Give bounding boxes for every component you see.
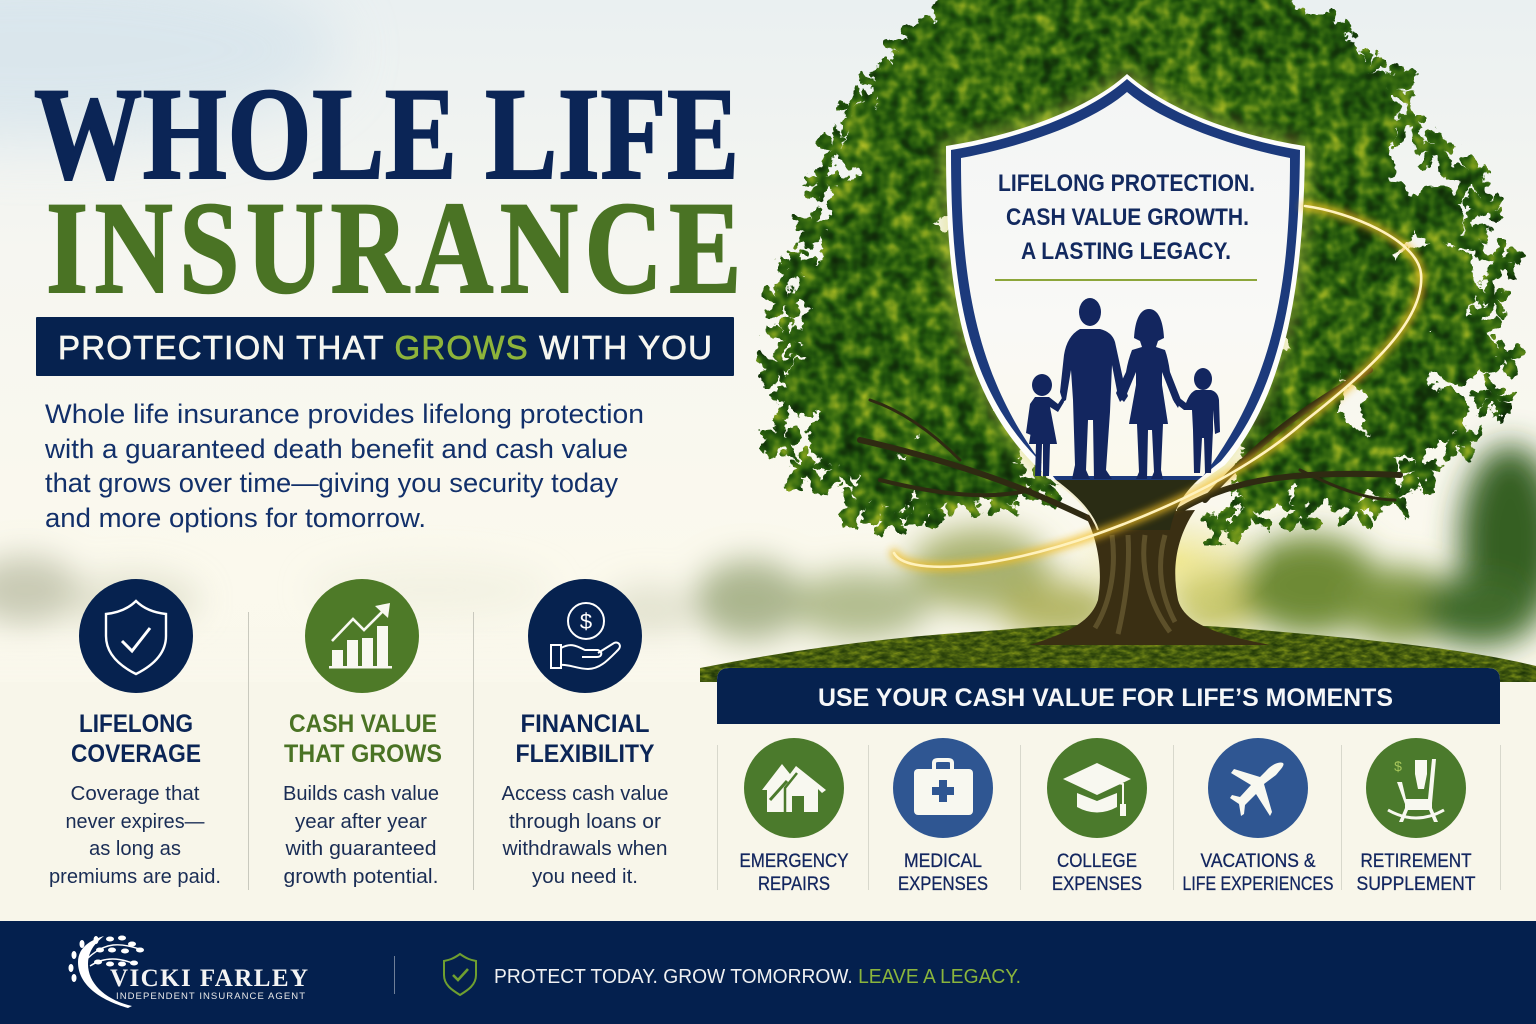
feature: lifelong coverage: as long as xyxy=(89,838,181,860)
feature: financial flexibility xyxy=(501,579,668,888)
intro paragraph: and more options for tomorrow. xyxy=(45,503,426,533)
title: WHOLE LIFE xyxy=(34,61,739,208)
icon: hand with coin xyxy=(528,579,642,693)
tagline: PROTECT TODAY. GROW TOMORROW. LEAVE A LEGACY. xyxy=(494,966,1021,988)
feature: financial flexibility: you need it. xyxy=(532,866,638,888)
item: college expenses xyxy=(1047,738,1147,895)
feature: financial flexibility: through loans or xyxy=(509,811,661,833)
icon: growth chart xyxy=(305,579,419,693)
feature: financial flexibility: withdrawals when xyxy=(501,838,668,860)
intro paragraph xyxy=(44,399,644,533)
item: vacations and life experiences: LIFE EXPERIENCES xyxy=(1182,874,1334,895)
feature: financial flexibility: FLEXIBILITY xyxy=(516,740,655,768)
feature: lifelong coverage: premiums are paid. xyxy=(49,866,221,888)
icon: hand with coin: $ xyxy=(580,609,592,634)
item: medical expenses xyxy=(893,738,993,895)
hill xyxy=(700,624,1536,682)
feature: cash value that grows: year after year xyxy=(295,811,427,833)
title xyxy=(34,61,741,322)
intro paragraph: with a guaranteed death benefit and cash value xyxy=(44,434,628,464)
item: medical expenses: MEDICAL xyxy=(904,851,982,872)
item: retirement supplement xyxy=(1356,738,1476,895)
item: emergency repairs: REPAIRS xyxy=(758,874,830,895)
tree trunk xyxy=(1030,510,1270,645)
item: retirement supplement: $ xyxy=(1394,758,1402,774)
feature: financial flexibility: FINANCIAL xyxy=(520,710,650,738)
intro paragraph: Whole life insurance provides lifelong protection xyxy=(45,399,644,429)
feature: cash value that grows: Builds cash value xyxy=(283,783,439,805)
feature: cash value that grows: THAT GROWS xyxy=(284,740,442,768)
glow around shield xyxy=(951,80,1300,470)
tree canopy xyxy=(754,0,1526,548)
feature: cash value that grows: with guaranteed xyxy=(284,838,436,860)
shield text: A LASTING LEGACY. xyxy=(1021,238,1231,265)
feature: lifelong coverage: never expires— xyxy=(66,811,204,833)
shield text: CASH VALUE GROWTH. xyxy=(1006,204,1249,231)
title: INSURANCE xyxy=(46,175,741,322)
feature: lifelong coverage: COVERAGE xyxy=(71,740,201,768)
feature: lifelong coverage xyxy=(49,579,221,888)
item: retirement supplement: RETIREMENT xyxy=(1360,851,1472,872)
panel heading: USE YOUR CASH VALUE FOR LIFE’S MOMENTS xyxy=(818,684,1393,712)
item: retirement supplement: SUPPLEMENT xyxy=(1356,874,1476,895)
logo: tree xyxy=(68,936,144,1008)
feature: lifelong coverage: Coverage that xyxy=(70,783,200,805)
subtitle banner: PROTECTION THAT GROWS WITH YOU xyxy=(58,329,712,366)
intro paragraph: that grows over time—giving you security today xyxy=(45,468,619,498)
item: college expenses: COLLEGE xyxy=(1057,851,1137,872)
item: emergency repairs: EMERGENCY xyxy=(740,851,849,872)
feature: cash value that grows: growth potential. xyxy=(284,866,438,888)
feature: financial flexibility: Access cash value xyxy=(502,783,668,805)
feature: cash value that grows: CASH VALUE xyxy=(289,710,437,738)
item: vacations and life experiences xyxy=(1182,738,1334,895)
tree branches xyxy=(860,370,1400,526)
footer bar: INDEPENDENT INSURANCE AGENT xyxy=(116,991,305,1002)
feature: cash value that grows xyxy=(283,579,442,888)
logo: name: VICKI FARLEY xyxy=(110,965,308,992)
subtitle banner xyxy=(36,317,734,376)
item: emergency repairs xyxy=(740,738,849,895)
footer bar xyxy=(0,921,1536,1024)
dividers xyxy=(248,612,474,890)
family silhouette xyxy=(1026,298,1220,479)
item: vacations and life experiences: VACATIONS & xyxy=(1200,851,1316,872)
panel: use your cash value xyxy=(717,668,1501,895)
icon: shield check xyxy=(79,579,193,693)
item: college expenses: EXPENSES xyxy=(1052,874,1142,895)
shield with family xyxy=(946,74,1305,530)
feature: lifelong coverage: LIFELONG xyxy=(79,710,193,738)
glowing swirl xyxy=(894,206,1421,567)
shield text: LIFELONG PROTECTION. xyxy=(998,170,1255,197)
item: medical expenses: EXPENSES xyxy=(898,874,988,895)
shield text xyxy=(998,170,1255,265)
icon: green shield xyxy=(444,954,476,995)
